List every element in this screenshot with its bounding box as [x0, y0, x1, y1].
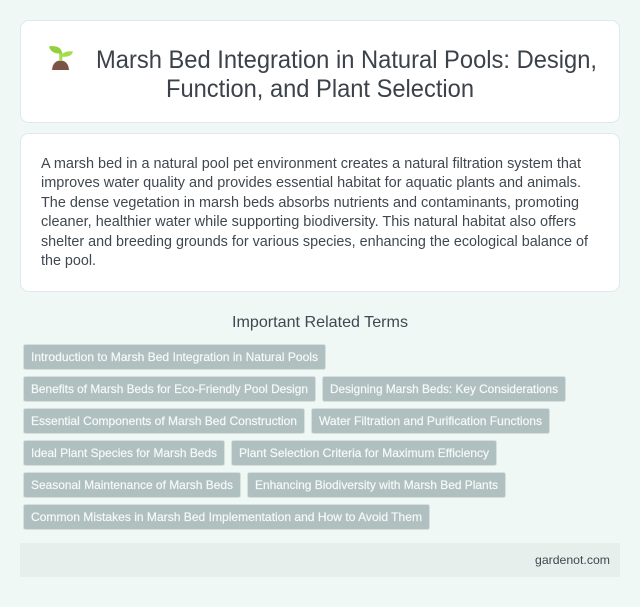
- related terms tags: Common Mistakes in Marsh Bed Implementation and How to Avoid Them: [31, 510, 422, 524]
- text block: description paragraph: A marsh bed in a natural pool pet environment creates a natural filtration system that: [41, 155, 582, 172]
- text block: description paragraph: improves water quality and provides essential habitat for aquatic plants and animals.: [41, 174, 581, 191]
- related terms tags: [24, 344, 566, 530]
- text block: description paragraph: The dense vegetation in marsh beds absorbs nutrients and contaminants, promoting: [41, 194, 579, 211]
- footer: gardenot.com: [535, 553, 610, 567]
- heading: related terms: Important Related Terms: [232, 314, 408, 331]
- related terms tags: Water Filtration and Purification Functions: [319, 414, 542, 428]
- title: Marsh Bed Integration in Natural Pools: Design,: [96, 46, 597, 74]
- related terms tags: Essential Components of Marsh Bed Construction: [31, 414, 297, 428]
- related terms tags: Enhancing Biodiversity with Marsh Bed Plants: [255, 478, 498, 492]
- related terms tags: Benefits of Marsh Beds for Eco-Friendly Pool Design: [31, 382, 308, 396]
- icon: seedling: [49, 46, 73, 70]
- related terms tags: Plant Selection Criteria for Maximum Efficiency: [239, 446, 489, 460]
- related terms tags: Ideal Plant Species for Marsh Beds: [31, 446, 217, 460]
- panel: description: [20, 134, 620, 292]
- related terms tags: Designing Marsh Beds: Key Considerations: [330, 382, 558, 396]
- footer: [20, 543, 620, 577]
- related terms tags: Seasonal Maintenance of Marsh Beds: [31, 478, 233, 492]
- title: Function, and Plant Selection: [166, 75, 474, 103]
- text block: description paragraph: [41, 155, 589, 269]
- text block: description paragraph: the pool.: [41, 252, 96, 269]
- related terms tags: Introduction to Marsh Bed Integration in Natural Pools: [31, 350, 318, 364]
- title: [96, 46, 597, 103]
- text block: description paragraph: cleaner, healthier water while supporting biodiversity. This natural habitat also offers: [41, 213, 576, 230]
- panel: title card: [20, 20, 620, 122]
- text block: description paragraph: shelter and breeding grounds for various species, enhancing the ecological balance of: [41, 233, 589, 250]
